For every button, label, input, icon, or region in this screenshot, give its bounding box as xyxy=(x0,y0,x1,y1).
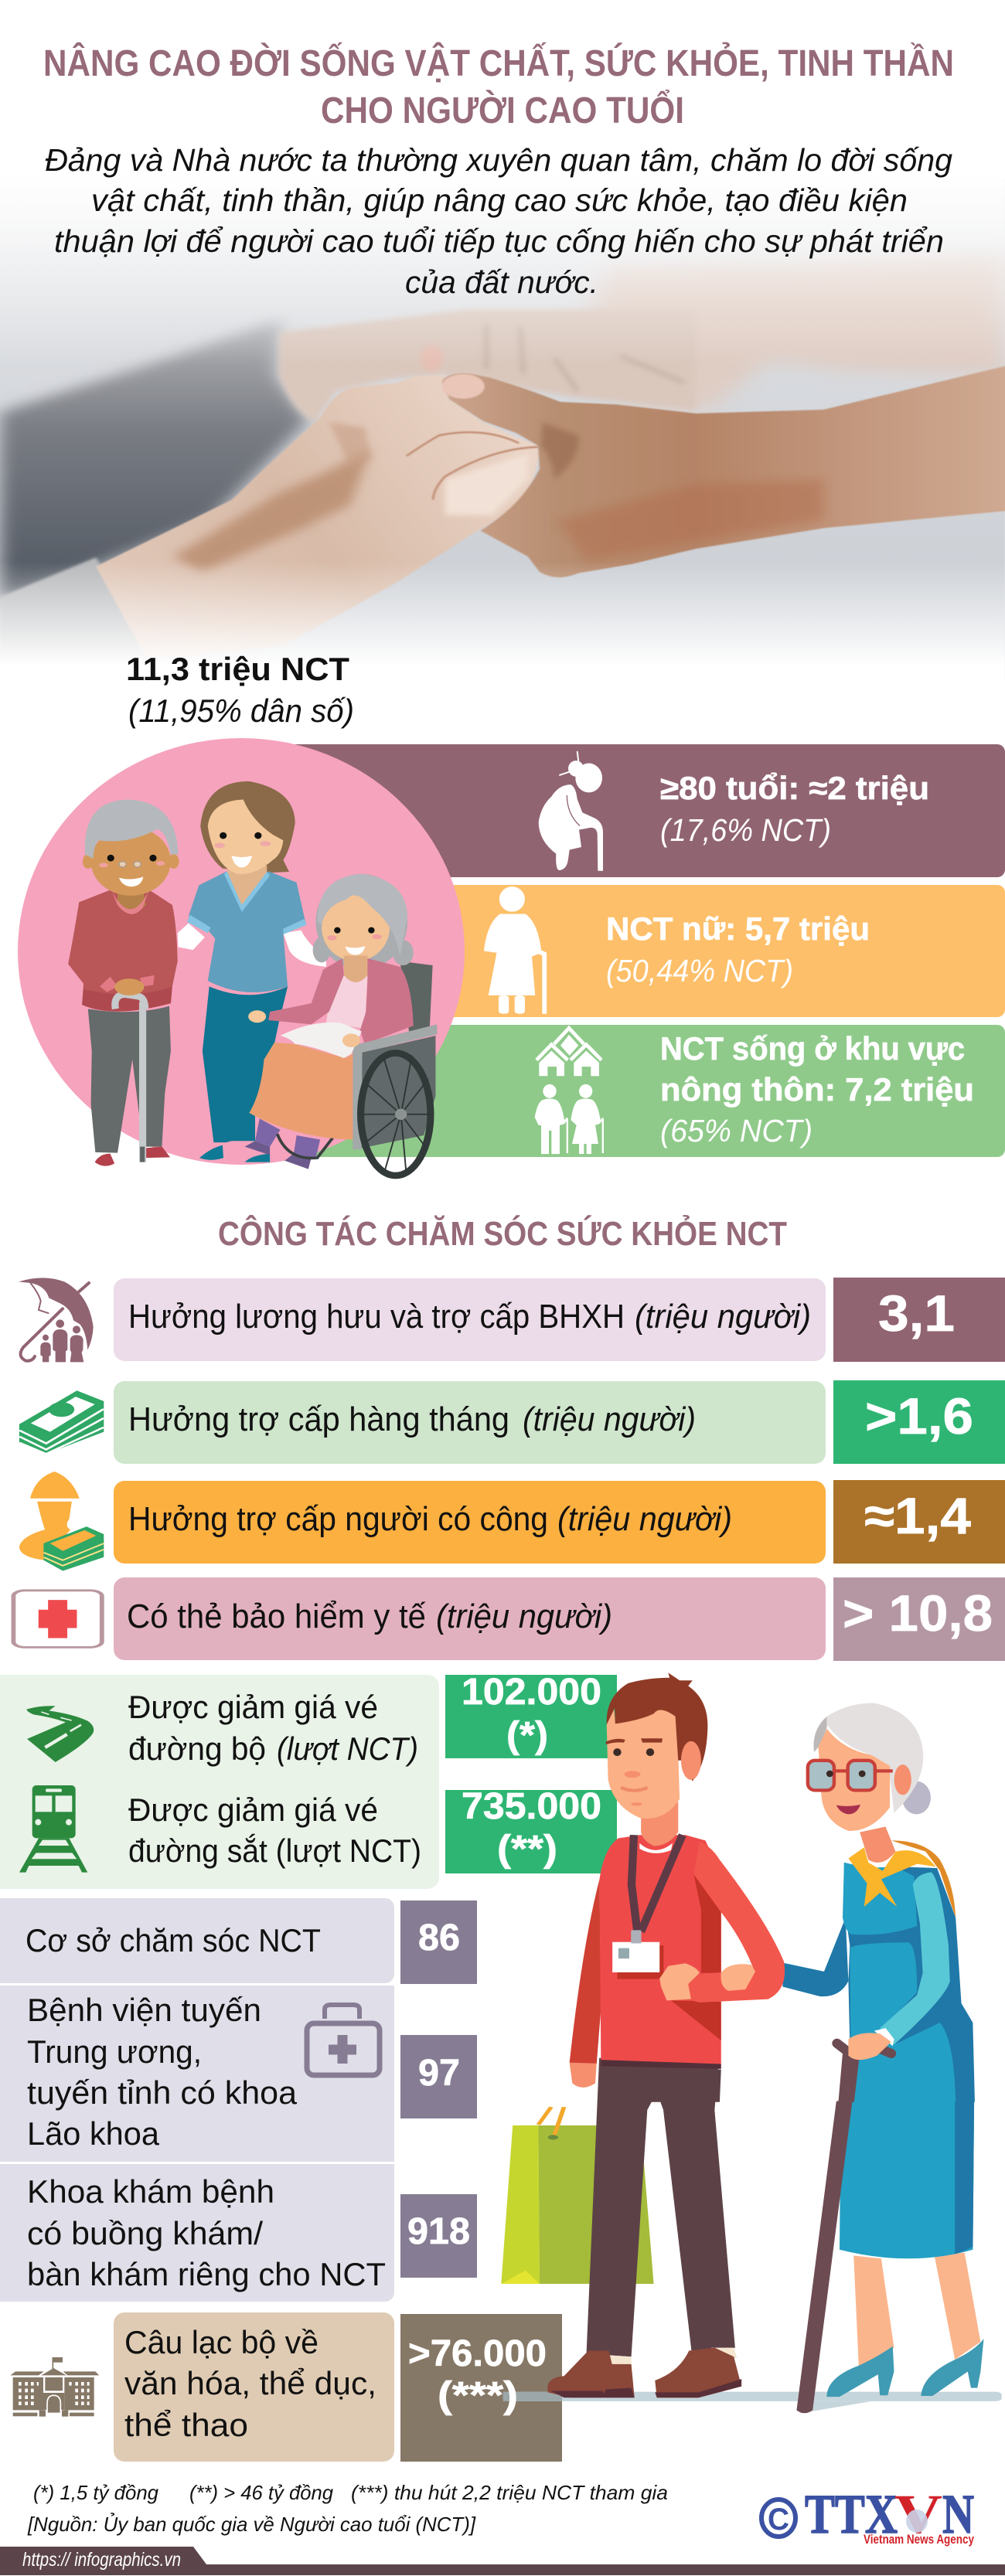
row: monthly allowance: Hưởng trợ cấp hàng tháng xyxy=(128,1400,509,1438)
icon: medical kit xyxy=(307,2005,380,2075)
row: health insurance: > 10,8 xyxy=(843,1584,993,1642)
icons: road and train xyxy=(19,1706,94,1873)
panel: examination rooms: Khoa khám bệnh xyxy=(27,2173,274,2210)
footer band with URL: https:// infographics.vn xyxy=(22,2549,181,2571)
title xyxy=(43,42,954,131)
values: ticket discounts xyxy=(445,1672,617,1873)
row: meritorious people: (triệu người) xyxy=(557,1500,732,1538)
bar text: rural: NCT sống ở khu vực xyxy=(660,1030,965,1067)
stat: total elderly: (11,95% dân số) xyxy=(128,692,354,729)
intro text: của đất nước. xyxy=(405,264,598,300)
logo: TTXVN xyxy=(761,2483,974,2547)
footnotes and source: (*) 1,5 tỷ đồng xyxy=(33,2481,159,2504)
illustration: young man helping elderly woman xyxy=(501,1673,1002,2413)
icon: train xyxy=(19,1785,87,1873)
icon: stooped elder xyxy=(539,751,603,871)
value: clubs xyxy=(408,2333,547,2416)
pink circle xyxy=(18,738,465,1165)
panel: geriatric hospitals: 97 xyxy=(418,2053,460,2094)
value: clubs: (***) xyxy=(438,2375,518,2416)
icon: umbrella with family xyxy=(19,1278,94,1362)
panel: geriatric hospitals: Bệnh viện tuyến xyxy=(27,1992,261,2028)
bar text: over 80 xyxy=(660,770,929,848)
footer band with URL xyxy=(0,2547,1005,2575)
intro text: Đảng và Nhà nước ta thường xuyên quan tâm, chăm lo đời sống xyxy=(45,142,952,178)
logo: TTXVN: N xyxy=(942,2483,974,2545)
panel: examination rooms xyxy=(0,2164,477,2302)
illustration: elderly man, nurse, woman in wheelchair xyxy=(68,781,437,1176)
row: meritorious people xyxy=(114,1480,1005,1564)
bar: over 80 xyxy=(232,744,1005,877)
panel: clubs xyxy=(114,2312,562,2462)
icon: houses and couple xyxy=(535,1028,604,1154)
photo: hands holding xyxy=(0,141,1005,684)
row: health insurance: Có thẻ bảo hiểm y tế xyxy=(127,1598,426,1635)
stat: total elderly xyxy=(126,651,354,729)
panel: ticket discounts: đường bộ xyxy=(128,1730,266,1767)
heading: health care: CÔNG TÁC CHĂM SÓC SỨC KHỎE NCT xyxy=(218,1213,787,1253)
panel: examination rooms: bàn khám riêng cho NCT xyxy=(27,2256,386,2292)
row: monthly allowance: (triệu người) xyxy=(523,1400,696,1438)
bar text: over 80: ≥80 tuổi: ≈2 triệu xyxy=(660,770,929,806)
panel: clubs: văn hóa, thể dục, xyxy=(124,2365,376,2401)
nurse xyxy=(178,781,326,1162)
woman lower body xyxy=(796,2101,984,2413)
man upper body xyxy=(570,1673,785,2102)
row: pension: Hưởng lương hưu và trợ cấp BHXH xyxy=(128,1298,625,1336)
bar: female xyxy=(232,885,1005,1017)
bar: rural xyxy=(232,1025,1005,1157)
panel: examination rooms: có buồng khám/ xyxy=(27,2215,263,2251)
woman in wheelchair xyxy=(245,874,437,1176)
panel: geriatric hospitals: tuyến tỉnh có khoa xyxy=(27,2074,298,2111)
bar text: rural: (65% NCT) xyxy=(660,1113,813,1148)
row: meritorious people: Hưởng trợ cấp người có công xyxy=(128,1500,548,1538)
row: monthly allowance: >1,6 xyxy=(865,1387,973,1445)
panel: care facilities xyxy=(0,1898,477,1984)
panel: geriatric hospitals: Trung ương, xyxy=(27,2033,202,2070)
woman upper body xyxy=(744,1703,975,2102)
icon: building xyxy=(10,2357,99,2417)
panel: ticket discounts: (lượt NCT) xyxy=(277,1730,418,1767)
icon: elderly woman xyxy=(484,886,547,1014)
man and woman upper body xyxy=(570,1673,975,2102)
bar text: female: (50,44% NCT) xyxy=(606,953,793,989)
values: ticket discounts: 735.000 xyxy=(462,1786,601,1827)
row: meritorious people: ≈1,4 xyxy=(864,1487,971,1544)
old man xyxy=(68,800,179,1166)
logo: TTXVN: TTX xyxy=(805,2483,898,2545)
panel: geriatric hospitals xyxy=(0,1986,477,2162)
row: pension xyxy=(114,1278,1005,1362)
row: health insurance: (triệu người) xyxy=(436,1598,612,1635)
values: ticket discounts: 102.000 xyxy=(462,1672,601,1713)
panel: ticket discounts xyxy=(0,1675,439,1889)
logo: TTXVN: V xyxy=(894,2483,942,2545)
panel: ticket discounts: đường sắt (lượt NCT) xyxy=(128,1832,421,1869)
bar text: over 80: (17,6% NCT) xyxy=(660,812,831,848)
row: pension: 3,1 xyxy=(878,1285,955,1342)
panel: clubs: thể thao xyxy=(124,2407,248,2443)
panel: clubs: Câu lạc bộ về xyxy=(124,2324,319,2360)
row: health insurance xyxy=(114,1577,1005,1661)
value: clubs: >76.000 xyxy=(408,2333,547,2374)
panel: geriatric hospitals: Lão khoa xyxy=(27,2115,160,2152)
panel: ticket discounts: Được giảm giá vé xyxy=(128,1689,378,1725)
bar text: female xyxy=(606,910,870,989)
panel: examination rooms: 918 xyxy=(407,2211,470,2252)
values: ticket discounts: (*) xyxy=(506,1715,548,1756)
bar text: rural xyxy=(660,1030,974,1148)
ground shadow xyxy=(503,2392,1002,2413)
footnotes and source: (**) > 46 tỷ đồng xyxy=(189,2481,334,2504)
icon: worker with money xyxy=(19,1472,104,1571)
intro text: vật chất, tinh thần, giúp nâng cao sức khỏe, tạo điều kiện xyxy=(91,182,908,218)
row: pension: (triệu người) xyxy=(635,1298,811,1336)
panel: care facilities: Cơ sở chăm sóc NCT xyxy=(26,1922,321,1958)
panel: ticket discounts: Được giảm giá vé xyxy=(128,1792,378,1828)
title: CHO NGƯỜI CAO TUỔI xyxy=(321,89,684,131)
values: ticket discounts: (**) xyxy=(497,1829,557,1870)
panel: care facilities: 86 xyxy=(418,1918,460,1958)
footnotes and source: [Nguồn: Ủy ban quốc gia về Người cao tuổi (NCT)] xyxy=(27,2512,476,2536)
shopping bag xyxy=(501,2107,654,2284)
bar text: rural: nông thôn: 7,2 triệu xyxy=(660,1071,974,1108)
icon: banknotes xyxy=(19,1390,104,1454)
row: monthly allowance xyxy=(114,1380,1005,1464)
icon: road xyxy=(26,1706,94,1762)
man lower body xyxy=(547,2058,741,2397)
icon: health card xyxy=(13,1591,102,1647)
stat: total elderly: 11,3 triệu NCT xyxy=(126,651,349,687)
intro text: thuận lợi để người cao tuổi tiếp tục cống hiến cho sự phát triển xyxy=(54,223,944,259)
bar text: female: NCT nữ: 5,7 triệu xyxy=(606,910,870,947)
intro text xyxy=(45,142,952,300)
logo: TTXVN: C xyxy=(768,2503,789,2537)
footnotes and source xyxy=(27,2481,668,2536)
logo: TTXVN: Vietnam News Agency xyxy=(864,2532,974,2547)
icons: banknotes, worker, health card xyxy=(13,1390,104,1647)
footnotes and source: (***) thu hút 2,2 triệu NCT tham gia xyxy=(351,2481,668,2504)
